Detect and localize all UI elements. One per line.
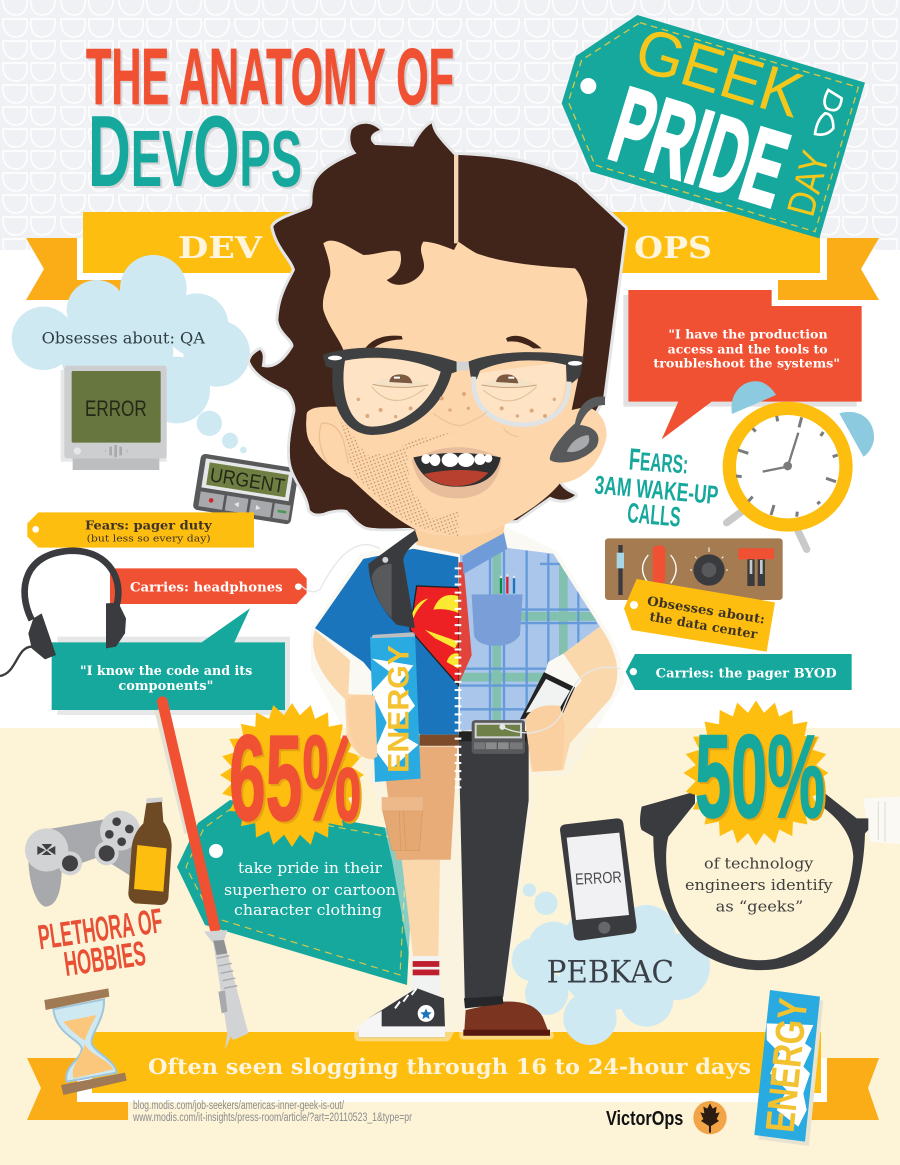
arms and leg skin xyxy=(313,626,617,958)
collar xyxy=(462,530,507,574)
text: plethora of hobbies: HOBBIES xyxy=(62,935,148,984)
icon: hourglass xyxy=(44,988,127,1095)
energy can held xyxy=(370,632,421,782)
text: geeks stat description xyxy=(685,855,833,916)
bottom ribbon banner: Often seen slogging through 16 to 24-hour days xyxy=(148,1054,751,1079)
tag: obsesses about the data center: the data center xyxy=(649,609,759,642)
text: fears 3am wake-up calls: CALLS xyxy=(626,497,682,533)
tag: geek pride day: DAY xyxy=(779,146,838,221)
mouth xyxy=(412,447,502,498)
top ribbon banner: dev / ops: OPS xyxy=(634,231,712,266)
source links: www.modis.com/it-insights/press-room/article/?art=20110523_1&type=pr xyxy=(132,1112,412,1124)
speech bubble: ops quote: "I have the production xyxy=(668,326,828,341)
character hair back xyxy=(250,123,625,528)
part line xyxy=(454,155,458,243)
shirt pocket and pens xyxy=(472,574,523,646)
text: geeks stat description: as “geeks” xyxy=(716,899,803,916)
cloud: pebkac: PEBKAC xyxy=(547,955,674,990)
superman logo xyxy=(410,586,459,686)
text: fears 3am wake-up calls xyxy=(593,442,720,533)
tag: fears pager duty: (but less so every day) xyxy=(87,533,211,544)
speech bubble: ops quote: troubleshoot the systems" xyxy=(653,356,840,371)
stat badge: 65%: 65% xyxy=(229,710,361,846)
belt xyxy=(419,731,529,746)
speech bubble: dev quote: components" xyxy=(118,678,213,693)
tag: geek pride day xyxy=(562,15,865,238)
victorops logo: VictorOps xyxy=(606,1108,683,1130)
icon: alarm clock xyxy=(723,381,874,549)
ear detail xyxy=(319,423,348,463)
teal tag: cartoon clothing stat: superhero or cartoon xyxy=(224,883,396,899)
icon: urgent pager: URGENT xyxy=(208,464,286,498)
tag: obsesses about the data center xyxy=(624,579,775,652)
eyebrows xyxy=(365,336,542,348)
tag: geek pride day: GEEK xyxy=(628,15,811,131)
text: geeks stat description: of technology xyxy=(704,855,814,872)
stat badge: 50% xyxy=(684,700,828,846)
tag: carries headphones xyxy=(110,568,307,604)
energy can held: ENERGY xyxy=(383,645,416,773)
tag: carries pager byod: Carries: the pager BYOD xyxy=(656,665,837,680)
red tie xyxy=(459,562,472,684)
icon: data center control panel xyxy=(605,538,783,600)
victorops logo xyxy=(606,1101,727,1134)
phone in right hand xyxy=(520,672,575,719)
stat badge: 65% xyxy=(220,703,364,847)
bluetooth earpiece xyxy=(550,397,605,462)
icon: beer bottle xyxy=(128,797,172,905)
right hand xyxy=(525,705,565,772)
text: fears 3am wake-up calls: FEARS: xyxy=(628,442,689,480)
shorts xyxy=(382,746,457,860)
belt pager xyxy=(472,667,620,754)
lenses tint xyxy=(339,358,450,432)
text: geeks stat description: engineers identify xyxy=(685,877,833,894)
glasses xyxy=(323,348,584,435)
tag: carries pager byod xyxy=(626,654,852,690)
lower left hair lock xyxy=(290,413,417,530)
t-shirt blue half xyxy=(315,549,458,735)
icon: phone with error xyxy=(560,818,637,941)
title: DEVOPS xyxy=(88,96,302,208)
cloud: obsesses about QA: Obsesses about: QA xyxy=(42,328,205,347)
text: plethora of hobbies: PLETHORA OF xyxy=(36,902,165,957)
tag: obsesses about the data center: Obsesses about: xyxy=(646,593,766,627)
icon: urgent pager xyxy=(193,453,299,525)
icon: error monitor: ERROR xyxy=(85,396,147,421)
icon: error monitor xyxy=(61,366,167,470)
icon: small glasses on tag xyxy=(815,90,842,135)
icon: phone with error: ERROR xyxy=(575,869,622,889)
icon: headphones xyxy=(0,551,126,676)
top ribbon banner: dev / ops xyxy=(26,212,879,300)
right dress shoe xyxy=(463,996,550,1036)
title: THE ANATOMY OF xyxy=(86,32,454,121)
pants xyxy=(459,741,529,1007)
plaid shirt half xyxy=(460,547,600,731)
speech bubble: ops quote xyxy=(623,290,862,439)
icon: gamepad xyxy=(25,811,140,907)
icon: big glasses frame xyxy=(640,792,900,970)
text: plethora of hobbies xyxy=(36,902,165,984)
tag: carries headphones: Carries: headphones xyxy=(130,579,283,594)
neck xyxy=(410,513,507,555)
silhouette halo xyxy=(315,530,620,1037)
top ribbon banner: dev / ops: DEV xyxy=(178,231,263,266)
left hand xyxy=(347,695,377,759)
nose and freckles xyxy=(357,392,556,437)
character body xyxy=(313,530,620,1037)
eyes xyxy=(372,374,537,401)
icon: energy can bottom right: ENERGY xyxy=(757,996,816,1134)
left sneaker xyxy=(358,988,445,1037)
speech bubble: dev quote xyxy=(52,608,290,715)
title xyxy=(86,32,454,208)
stubble xyxy=(340,417,458,537)
source links: blog.modis.com/job-seekers/americas-inner-geek-is-out/ xyxy=(133,1100,345,1112)
tag: fears pager duty: Fears: pager duty xyxy=(85,518,213,532)
source links xyxy=(132,1100,412,1124)
icon: lightsaber xyxy=(157,702,248,1050)
speech bubble: ops quote: access and the tools to xyxy=(668,341,828,356)
bottom ribbon banner xyxy=(27,1032,879,1120)
character head xyxy=(290,155,607,628)
teal tag: cartoon clothing stat: character clothing xyxy=(234,903,382,919)
teal tag: cartoon clothing stat xyxy=(177,800,415,985)
sock xyxy=(412,956,440,1002)
zipper xyxy=(448,567,468,790)
text: fears 3am wake-up calls: 3AM WAKE-UP xyxy=(593,469,720,510)
speech bubble: dev quote: "I know the code and its xyxy=(80,663,252,678)
cloud: obsesses about QA xyxy=(12,255,250,453)
tag: fears pager duty xyxy=(27,512,254,548)
headphones around neck xyxy=(300,530,418,628)
face xyxy=(306,241,607,536)
teal tag: cartoon clothing stat: take pride in their xyxy=(238,861,382,877)
cloud: pebkac xyxy=(512,881,710,1045)
